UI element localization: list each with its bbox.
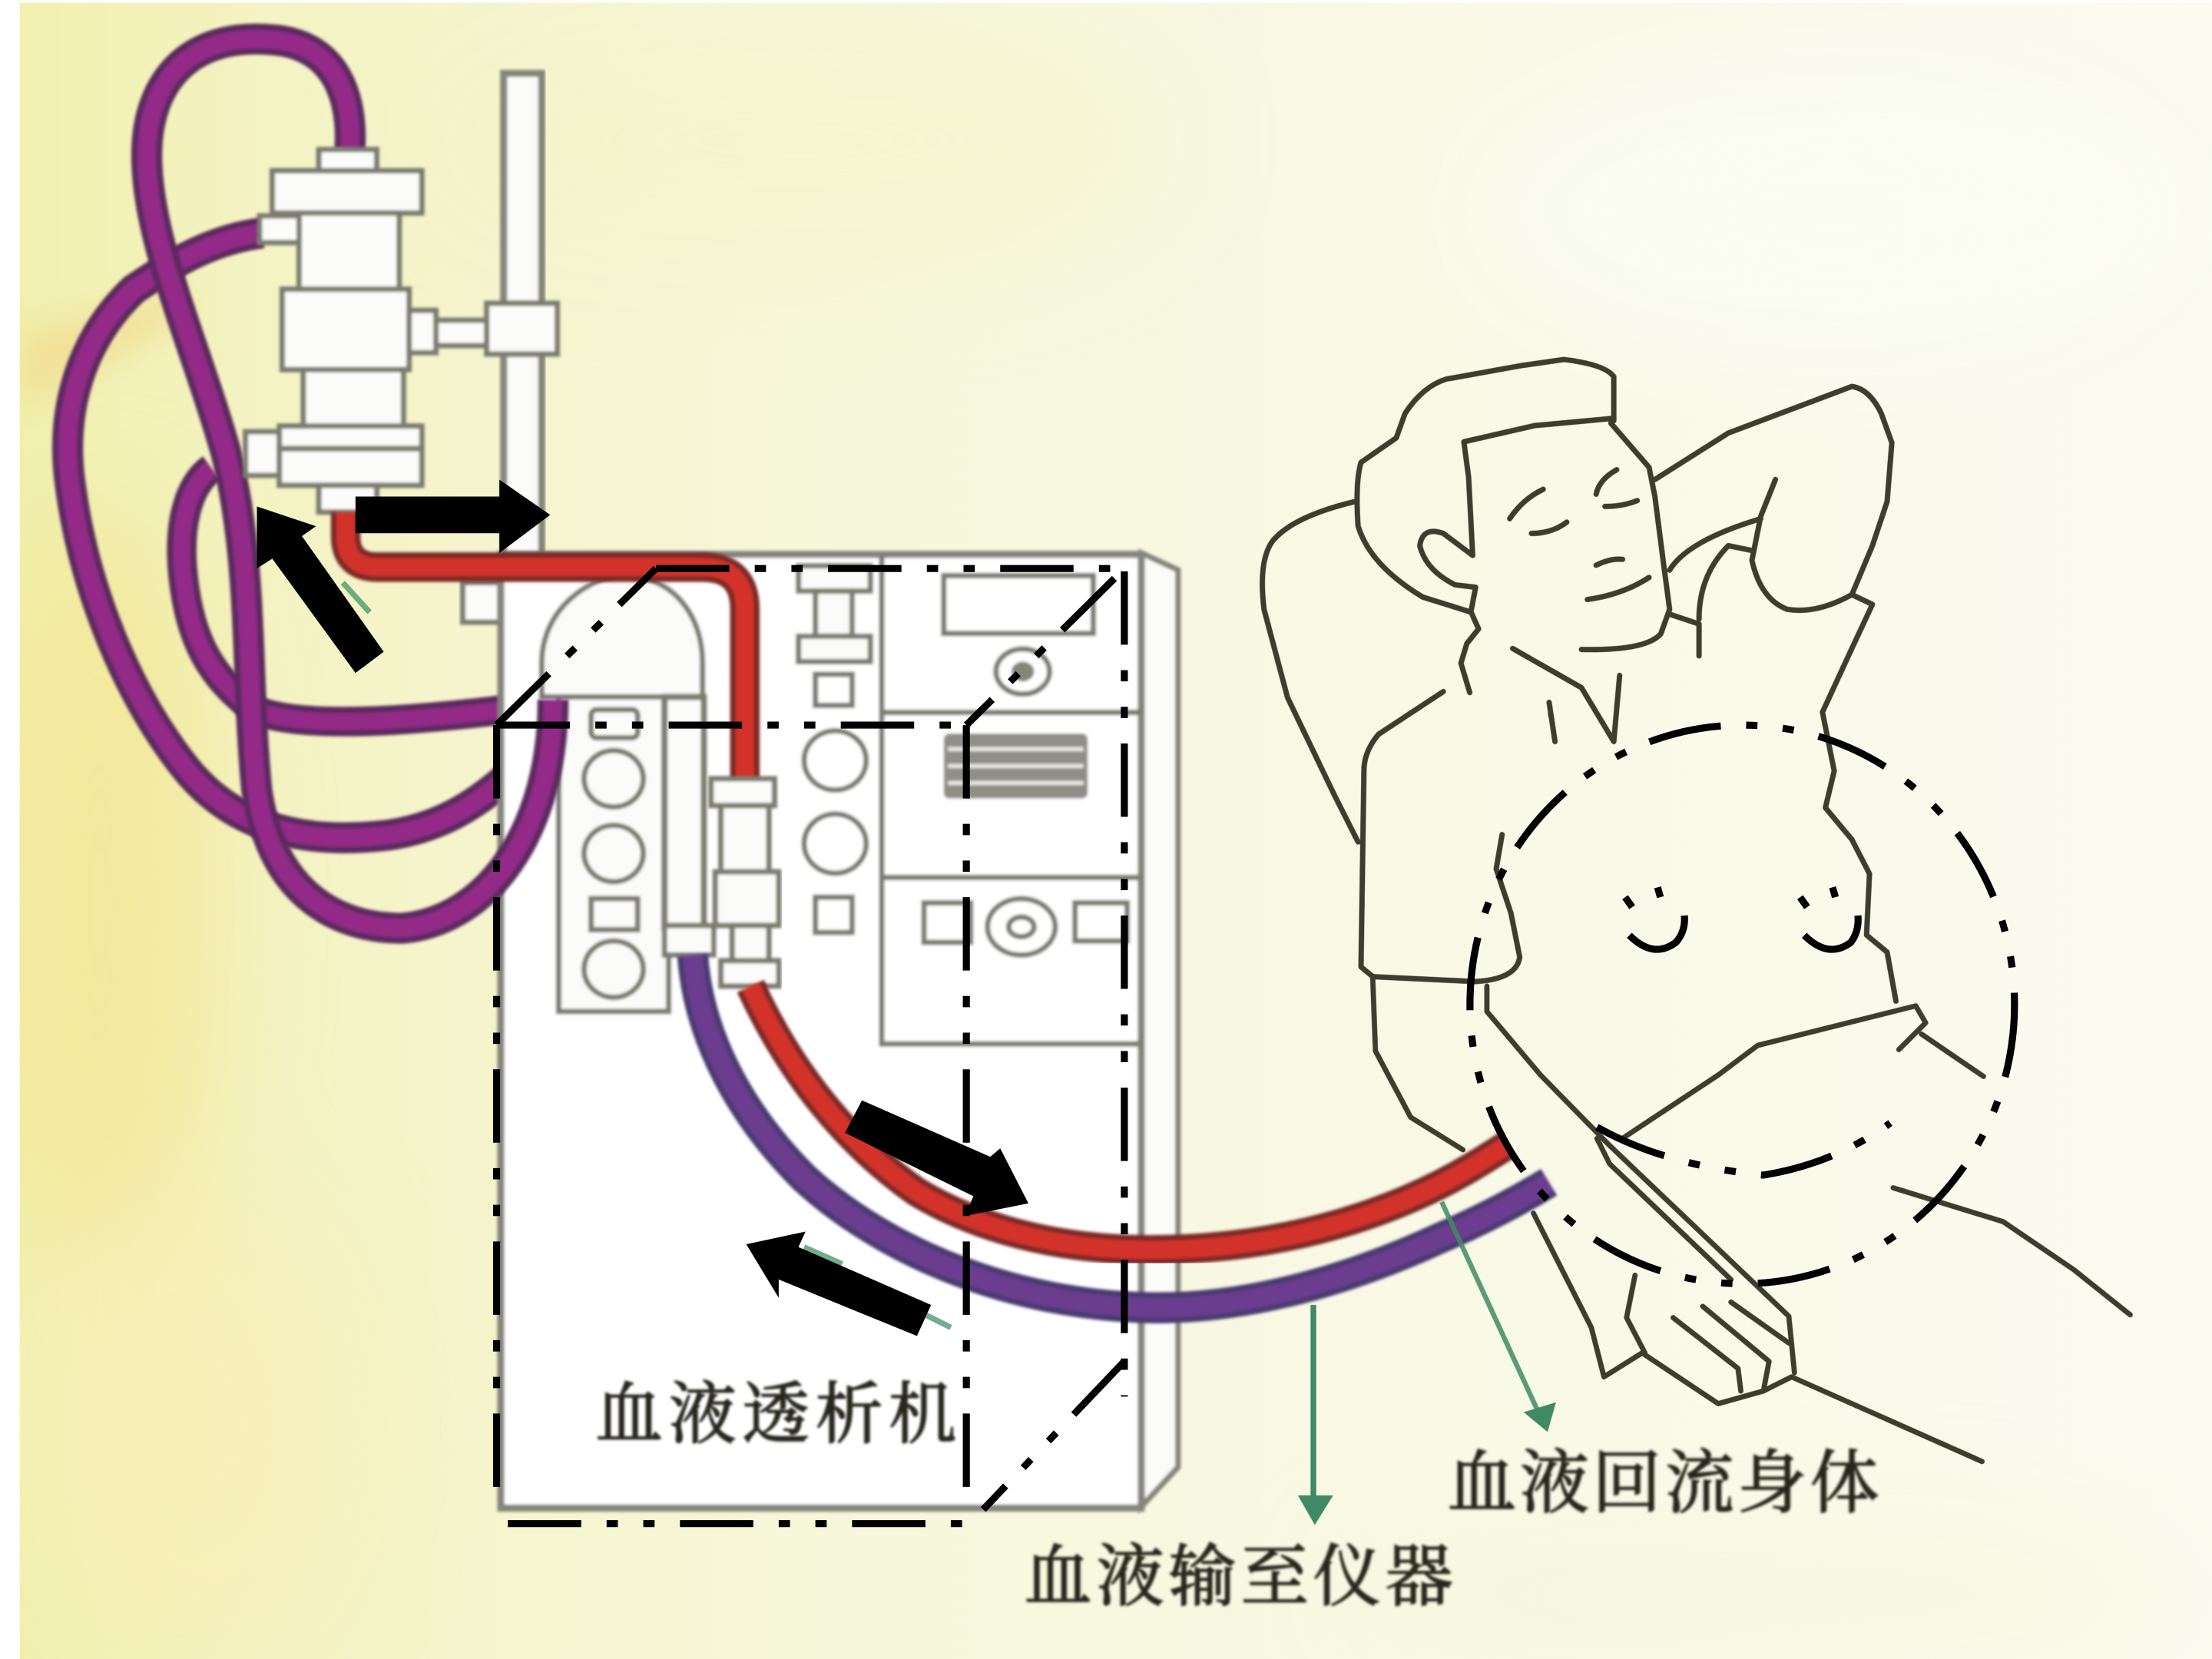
tube: red arterial line bbox=[346, 512, 745, 779]
tube: purple rear loops bbox=[68, 233, 505, 838]
tube: venous return line bbox=[693, 955, 1549, 1308]
machine side panel bbox=[1141, 553, 1178, 1507]
green arrow: blood to machine bbox=[1298, 1305, 1333, 1525]
label: dialysis machine: 血液透析机 bbox=[595, 1378, 956, 1453]
dash-dot sphere bbox=[1470, 725, 2015, 1283]
tube: red line to patient bbox=[750, 986, 1507, 1250]
black arrow: venous flow bbox=[747, 1231, 931, 1336]
dialyzer bbox=[246, 150, 558, 512]
small dash-dot marks bbox=[1625, 887, 1858, 949]
left control column bbox=[558, 697, 669, 1012]
iv pole bbox=[462, 74, 541, 622]
black arrow: dialyzer outlet bbox=[356, 479, 550, 553]
black arrow: into dialyzer bbox=[257, 506, 384, 673]
black arrow: red line flow bbox=[845, 1101, 1028, 1216]
pump connector bbox=[711, 779, 779, 986]
dash-dot wireframe box bbox=[497, 568, 1124, 1524]
patient arm and blanket bbox=[1373, 976, 2130, 1462]
green arrow remnants bbox=[343, 583, 951, 1327]
patient bbox=[1263, 359, 2130, 1462]
right panels bbox=[882, 556, 1141, 1044]
dome pump bbox=[541, 575, 703, 697]
middle controls bbox=[799, 566, 870, 932]
dialysis machine bbox=[501, 553, 1178, 1508]
venous chamber bbox=[664, 697, 714, 955]
machine body bbox=[501, 555, 1141, 1508]
label: blood sent to instrument: 血液输至仪器 bbox=[1024, 1540, 1453, 1615]
green arrow: blood returning bbox=[1442, 1202, 1556, 1432]
patient upper body bbox=[1263, 359, 1896, 1001]
label: blood returns to body: 血液回流身体 bbox=[1447, 1446, 1879, 1522]
tube: purple to machine bbox=[147, 39, 553, 929]
